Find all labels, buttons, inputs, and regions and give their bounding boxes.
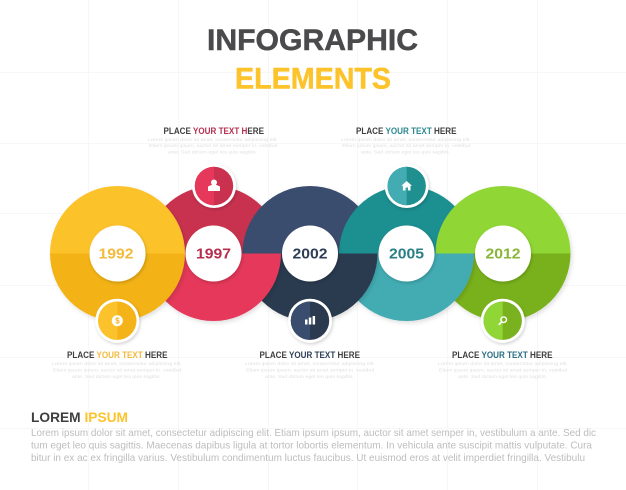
title line: elements: ELEMENTS (235, 62, 391, 96)
body: Etiam ipsum ipsum, auctor sit amet semper in, vestibul (149, 143, 277, 149)
text block: top right (341, 126, 471, 156)
year 2002: 2002 (292, 247, 328, 263)
body: Lorem ipsum dolor sit amet, consectetur adipiscing elit. (245, 361, 375, 367)
icon: home badge (385, 164, 429, 208)
year 2012: 2012 (486, 247, 520, 263)
year 2005 (378, 226, 434, 282)
body: Lorem ipsum dolor sit amet, consectetur adipiscing elit. (438, 361, 568, 367)
year 1997: 1997 (196, 247, 231, 263)
icon: person badge (192, 164, 236, 208)
year 1992 (90, 226, 146, 282)
title (207, 24, 418, 96)
text block: bottom left (52, 350, 182, 380)
body (438, 361, 568, 380)
body: Etiam ipsum ipsum, auctor sit amet semper in, vestibul (342, 143, 470, 149)
body: ante. Sed dictum eget leo quis sagittis. (361, 150, 450, 156)
body: ante. Sed dictum eget leo quis sagittis. (458, 374, 547, 380)
body: Lorem ipsum dolor sit amet, consectetur adipiscing elit. (148, 137, 278, 143)
body (245, 361, 375, 380)
year 2012 (475, 226, 531, 282)
footer paragraph: tum eget leo quis sagittis. Maecenas dapibus ligula at tortor lobortis elementum. In vehicula ante suscipit mattis vulputate. Cura (31, 440, 592, 452)
heading: PLACE YOUR TEXT HERE (67, 350, 167, 360)
footer heading: LOREM IPSUM (31, 409, 128, 425)
footer text block (31, 409, 596, 464)
icon: bar chart badge (288, 299, 332, 343)
footer paragraph (31, 428, 596, 464)
year 1997 (186, 226, 242, 282)
title line: infographic: INFOGRAPHIC (207, 24, 418, 57)
body: Etiam ipsum ipsum, auctor sit amet semper in, vestibul (439, 368, 567, 374)
icon: dollar coin badge (95, 299, 139, 343)
footer paragraph: bitur in ex ac ex fringilla varius. Vestibulum condimentum luctus faucibus. Ut euismod eros at velit imperdiet fringilla. Vestibulu (31, 453, 585, 464)
body (148, 137, 278, 156)
ring upper halves (50, 186, 574, 254)
text block: top left (148, 126, 278, 156)
body: Etiam ipsum ipsum, auctor sit amet semper in, vestibul (246, 368, 374, 374)
heading: PLACE YOUR TEXT HERE (356, 126, 456, 136)
year 2002 (282, 226, 338, 282)
body (341, 137, 471, 156)
heading: PLACE YOUR TEXT HERE (164, 126, 264, 136)
body: ante. Sed dictum eget leo quis sagittis. (168, 150, 257, 156)
body: Etiam ipsum ipsum, auctor sit amet semper in, vestibul (53, 368, 181, 374)
body: Lorem ipsum dolor sit amet, consectetur adipiscing elit. (341, 137, 471, 143)
icon: magnifier badge (481, 299, 525, 343)
timeline ring chain (50, 186, 570, 321)
body: ante. Sed dictum eget leo quis sagittis. (72, 374, 161, 380)
heading: PLACE YOUR TEXT HERE (452, 350, 552, 360)
body: ante. Sed dictum eget leo quis sagittis. (265, 374, 354, 380)
footer paragraph: Lorem ipsum dolor sit amet, consectetur adipiscing elit. Etiam ipsum ipsum, auctor sit amet semper in, vestibulum a ante. Sed dic (31, 428, 596, 439)
text block: bottom right (438, 350, 568, 380)
body (52, 361, 182, 380)
year 1992: 1992 (98, 247, 134, 263)
ring lower halves (50, 254, 574, 324)
body: Lorem ipsum dolor sit amet, consectetur adipiscing elit. (52, 361, 182, 367)
heading: PLACE YOUR TEXT HERE (260, 350, 360, 360)
year 2005: 2005 (389, 247, 424, 263)
icon: dollar coin badge: $ (115, 317, 120, 326)
text block: bottom center (245, 350, 375, 380)
